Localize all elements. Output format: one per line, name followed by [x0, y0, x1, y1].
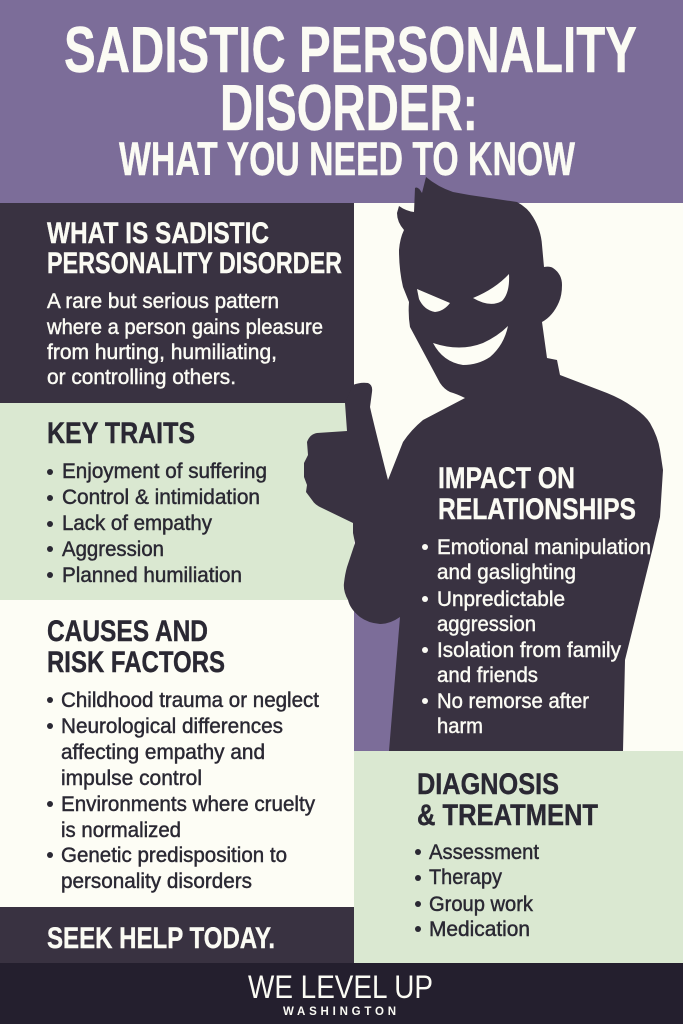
- list: key traits: Control & intimidation: [62, 486, 260, 509]
- logo: washington: WASHINGTON: [283, 1006, 396, 1018]
- list: key traits: Planned humiliation: [62, 564, 242, 587]
- text: definition: from hurting, humiliating,: [47, 341, 277, 364]
- list: impact: and friends: [437, 664, 538, 687]
- heading: what is: WHAT IS SADISTIC: [47, 217, 269, 250]
- heading: impact: IMPACT ON: [438, 462, 575, 495]
- text: definition: A rare but serious pattern: [47, 290, 279, 313]
- list: treatment: Therapy: [429, 866, 502, 889]
- list: impact: aggression: [437, 613, 536, 636]
- silhouette figure with thumbs up: [304, 177, 663, 751]
- list: causes: Childhood trauma or neglect: [61, 689, 319, 712]
- list: causes: Environments where cruelty: [61, 793, 315, 816]
- icon: left eye: [417, 289, 450, 312]
- heading: what is: [47, 217, 342, 280]
- icon: right eye: [473, 274, 509, 304]
- text: definition: [46, 290, 323, 389]
- panel: diagnosis and treatment: [354, 751, 683, 963]
- header banner: [0, 0, 683, 203]
- list: causes: impulse control: [61, 767, 202, 790]
- heading: causes: CAUSES AND: [47, 615, 208, 648]
- purple accent strip: [354, 590, 414, 751]
- heading: impact: RELATIONSHIPS: [438, 493, 636, 526]
- heading: diagnosis: & TREATMENT: [417, 799, 598, 832]
- title: DISORDER:: [220, 71, 478, 144]
- text: definition: or controlling others.: [47, 366, 236, 389]
- heading: causes: [47, 615, 225, 679]
- list: causes: Genetic predisposition to: [61, 844, 287, 867]
- footer with logo: [0, 963, 683, 1024]
- list: key traits: Enjoyment of suffering: [62, 460, 267, 483]
- list: treatment: Medication: [429, 918, 530, 941]
- list: treatment: [415, 841, 539, 941]
- list: treatment: Group work: [429, 893, 533, 916]
- list: impact: [422, 536, 651, 738]
- list: key traits: Lack of empathy: [62, 512, 212, 535]
- panel: right background: [354, 203, 683, 751]
- heading: diagnosis: DIAGNOSIS: [417, 768, 559, 801]
- panel: causes: [0, 600, 354, 907]
- panel: what is: [0, 203, 354, 403]
- list: impact: Isolation from family: [437, 639, 621, 662]
- title: [64, 13, 637, 185]
- heading: what is: PERSONALITY DISORDER: [47, 247, 342, 280]
- panel: call to action: [0, 907, 354, 963]
- list: impact: Unpredictable: [437, 588, 565, 611]
- list: impact: No remorse after: [437, 690, 589, 713]
- heading: diagnosis: [417, 768, 598, 832]
- list: causes: affecting empathy and: [61, 741, 265, 764]
- heading: causes: RISK FACTORS: [47, 646, 225, 679]
- panel: call to action: SEEK HELP TODAY.: [47, 922, 275, 955]
- list: key traits: [47, 460, 267, 587]
- list: key traits: Aggression: [62, 538, 164, 561]
- logo: we level up: WE LEVEL UP: [248, 969, 433, 1005]
- heading: impact: [438, 462, 636, 526]
- icon: grin: [433, 326, 508, 365]
- panel: key traits: [0, 403, 354, 600]
- list: causes: Neurological differences: [61, 715, 283, 738]
- list: causes: personality disorders: [61, 870, 252, 893]
- list: impact: and gaslighting: [437, 561, 576, 584]
- text: definition: where a person gains pleasure: [46, 316, 323, 339]
- list: causes: is normalized: [61, 819, 181, 842]
- panel: impact on relationships: [422, 462, 651, 738]
- list: impact: Emotional manipulation: [437, 536, 651, 559]
- heading: key traits: KEY TRAITS: [47, 417, 195, 450]
- list: causes: [47, 689, 319, 893]
- list: impact: harm: [437, 715, 483, 738]
- list: treatment: Assessment: [429, 841, 539, 864]
